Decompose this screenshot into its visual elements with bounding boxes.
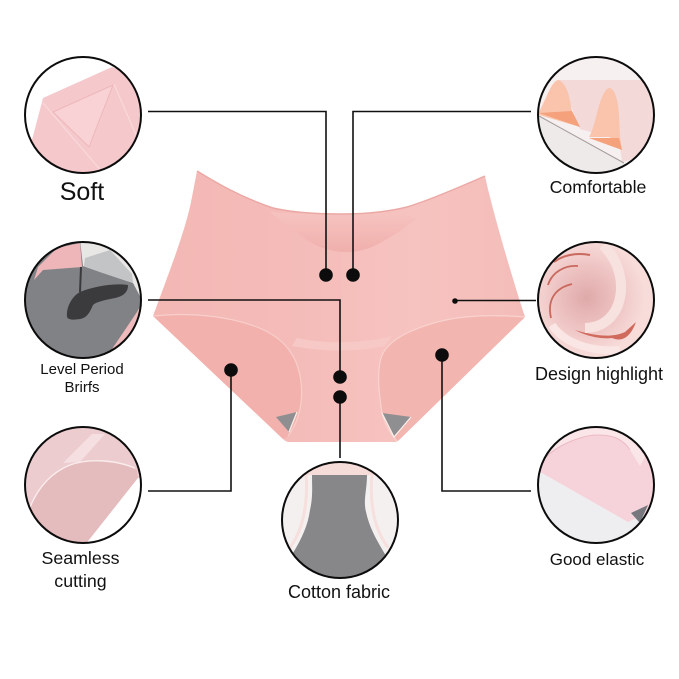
waistband inner shade bbox=[270, 212, 417, 252]
leg seams bbox=[153, 314, 302, 436]
heading: Soft: Soft bbox=[60, 178, 104, 206]
marker dots bbox=[224, 268, 458, 404]
icon: cotton fabric circle bbox=[282, 462, 398, 580]
garment: pink briefs bbox=[153, 171, 525, 442]
leg opening: right inner bbox=[379, 316, 525, 441]
label: Seamless cutting: cutting bbox=[54, 571, 107, 591]
label: Seamless cutting: Seamless bbox=[41, 548, 120, 568]
leg opening: left inner bbox=[153, 314, 302, 439]
label: Design highlight: Design highlight bbox=[535, 364, 663, 384]
label: Comfortable: Comfortable bbox=[550, 177, 647, 197]
crotch highlight band bbox=[292, 336, 392, 350]
icon: seamless cutting circle bbox=[25, 427, 145, 545]
icon: leak-proof fabric circle bbox=[25, 240, 142, 358]
icon: good elastic circle bbox=[538, 427, 654, 543]
connector lines bbox=[148, 112, 536, 491]
icon: soft fabric circle bbox=[20, 57, 145, 175]
icon: design highlight swirl circle bbox=[538, 242, 655, 358]
gusset: grey cotton bbox=[276, 412, 411, 437]
label: Level Period Brirfs: Level Period bbox=[40, 361, 124, 378]
icon: comfortable fabric circle bbox=[536, 57, 656, 175]
label: Level Period Brirfs: Brirfs bbox=[64, 379, 100, 396]
label: Good elastic: Good elastic bbox=[550, 550, 645, 569]
label: Cotton fabric: Cotton fabric bbox=[288, 582, 390, 602]
